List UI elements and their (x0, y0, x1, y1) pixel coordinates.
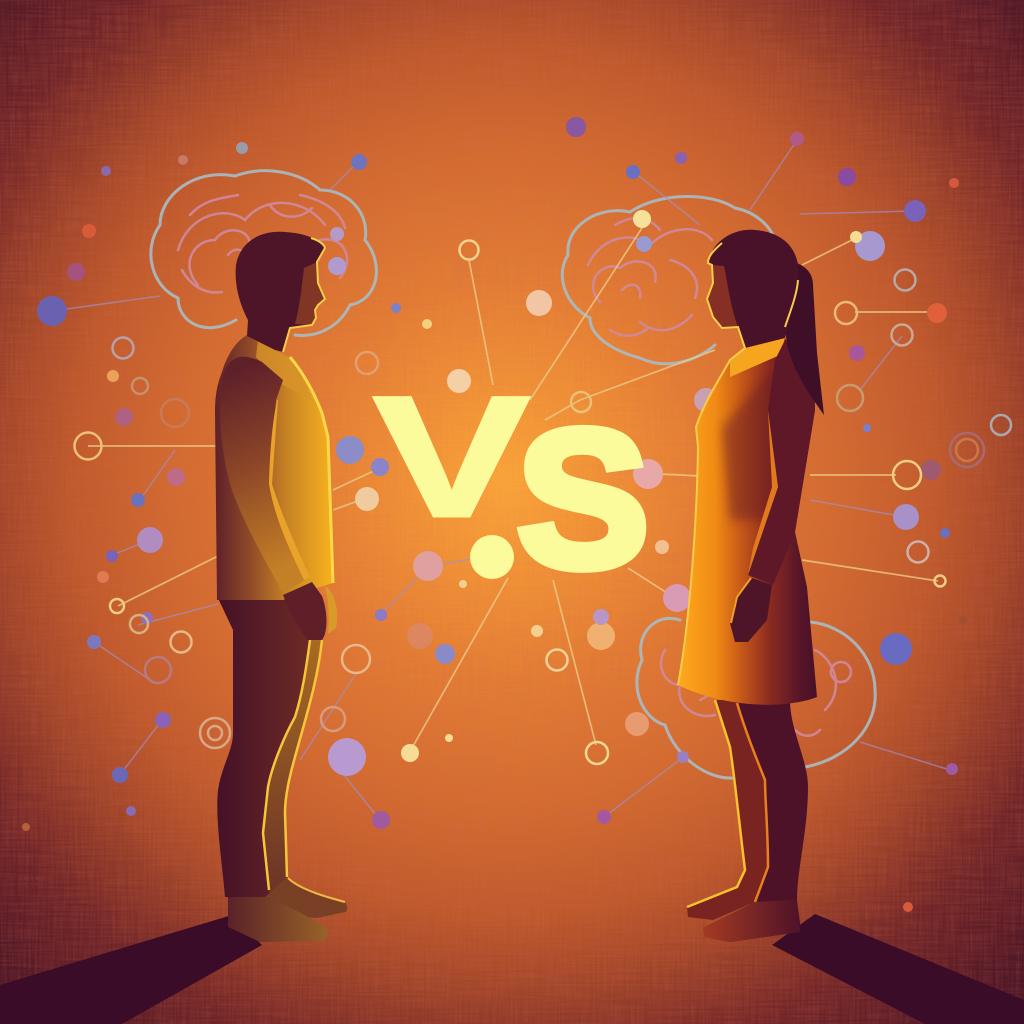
brain outline: left (151, 171, 376, 335)
woman right leg (703, 700, 808, 942)
woman face rim light (678, 243, 745, 685)
woman head and hair (707, 230, 798, 348)
woman dress (678, 338, 817, 705)
VS lettering: V (373, 361, 530, 553)
man collar light patch (256, 340, 312, 400)
man hand (283, 582, 326, 640)
man front leg (263, 640, 322, 897)
woman leg highlights (687, 700, 768, 907)
man sleeve highlight (269, 400, 310, 580)
floor shadows (0, 914, 1024, 1024)
man face rim light (283, 238, 325, 352)
secondary network lines (52, 140, 950, 820)
man torso (215, 335, 333, 600)
woman ponytail (785, 263, 824, 415)
woman hair rim light (785, 280, 798, 327)
VS lettering: S (517, 390, 649, 608)
figure: man (215, 232, 347, 942)
man back leg (217, 590, 312, 897)
network lines (88, 228, 938, 748)
network nodes: filled (22, 117, 967, 912)
woman dress chest shade (722, 365, 800, 520)
brain outline: right bottom (637, 618, 875, 778)
man chest rim light (290, 357, 333, 583)
man face shade (295, 262, 325, 325)
woman front leg (687, 700, 768, 920)
network nodes: rings (74, 240, 1011, 764)
man shoes (228, 877, 347, 942)
woman sleeve highlight (748, 410, 778, 575)
woman shoes (703, 900, 800, 942)
woman face shade (707, 265, 738, 328)
man sleeve (220, 357, 308, 593)
woman hand (730, 578, 772, 642)
man head and neck (236, 232, 325, 352)
figure: woman (678, 230, 824, 942)
brain outline: right top (562, 196, 775, 364)
man leg highlights (263, 640, 310, 890)
woman collar (730, 338, 785, 377)
VS lettering (373, 361, 649, 608)
woman sleeve (748, 340, 815, 585)
